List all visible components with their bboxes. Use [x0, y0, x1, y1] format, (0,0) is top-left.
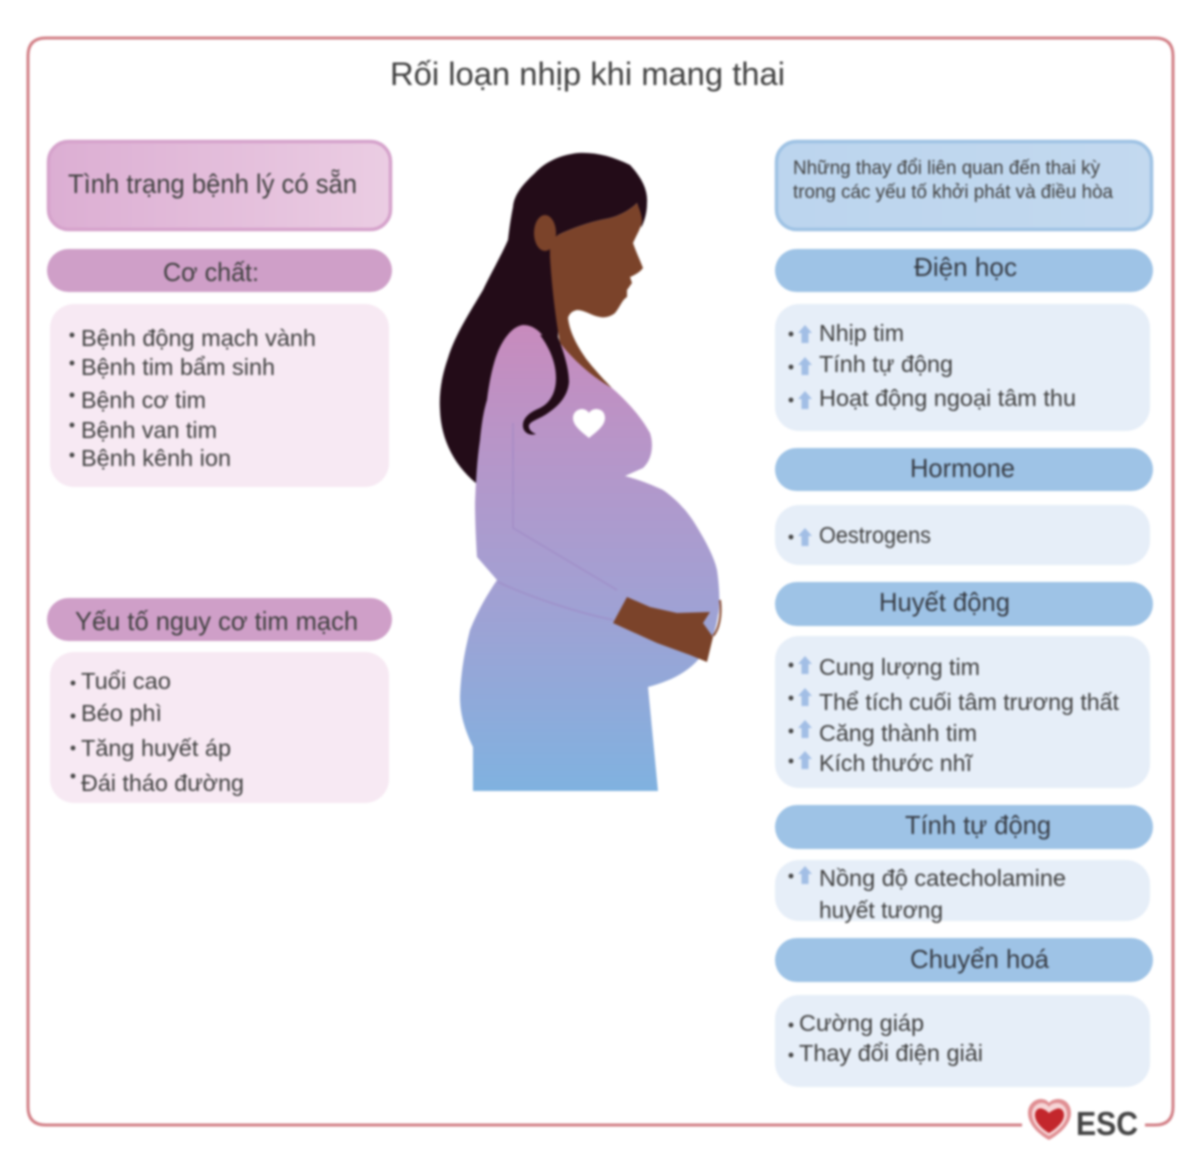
icon: up arrow	[798, 357, 812, 375]
panel: metabolic list: Cường giáp	[799, 1010, 924, 1036]
panel: risk factor list	[50, 652, 389, 803]
panel: haemodynamics list: Kích thước nhĩ	[819, 750, 974, 776]
icon: up arrow	[798, 688, 812, 706]
panel: risk factor list: Tuổi cao	[81, 668, 171, 694]
illustration: pregnant woman	[440, 153, 721, 791]
heading: cardiovascular risk factors	[47, 598, 392, 641]
panel: risk factor list: Tăng huyết áp	[81, 735, 231, 761]
hand	[613, 597, 713, 662]
heading: hormones	[775, 448, 1153, 491]
heading: metabolic	[775, 938, 1153, 982]
panel: pregnancy-related changes heading	[776, 142, 1152, 230]
logo: ESC: ESC	[1076, 1105, 1138, 1142]
panel: substrate list: Bệnh cơ tim	[81, 387, 206, 413]
fingers behind belly	[713, 600, 721, 636]
heading: metabolic: Chuyển hoá	[910, 944, 1050, 974]
panel: substrate list: Bệnh van tim	[81, 417, 217, 443]
icon: up arrow	[798, 866, 812, 884]
heart on chest	[573, 409, 605, 438]
ear	[534, 215, 556, 251]
panel: hormones list	[775, 505, 1150, 565]
panel: electrophysiology list: Tính tự động	[819, 351, 953, 377]
panel: substrate list: Bệnh kênh ion	[81, 445, 231, 471]
panel: haemodynamics list: Căng thành tim	[819, 720, 977, 746]
panel: pregnancy-related changes heading: trong các yếu tố khởi phát và điều hòa	[793, 182, 1113, 203]
heading: substrates	[47, 249, 392, 292]
panel: electrophysiology list	[775, 304, 1150, 431]
icon: up arrow	[798, 656, 812, 674]
panel: pregnancy-related changes heading: Những thay đổi liên quan đến thai kỳ	[793, 158, 1100, 179]
icon: up arrow	[798, 325, 812, 343]
arm fold lines	[498, 423, 617, 620]
hair	[440, 153, 647, 487]
icon: up arrow	[798, 751, 812, 769]
heading: cardiovascular risk factors: Yếu tố nguy cơ tim mạch	[75, 606, 358, 636]
panel: autonomic list: Nồng độ catecholamine	[819, 865, 1066, 891]
dress	[460, 325, 719, 791]
panel: autonomic list: huyết tương	[819, 897, 943, 923]
logo: ESC	[1028, 1099, 1138, 1142]
heading: haemodynamics: Huyết động	[879, 587, 1010, 617]
heading: hormones: Hormone	[910, 453, 1015, 483]
panel: substrate list: Bệnh tim bẩm sinh	[81, 354, 275, 380]
heading: electrophysiology	[775, 249, 1153, 292]
panel: hormones list: Oestrogens	[819, 522, 931, 548]
heading: electrophysiology: Điện học	[914, 252, 1017, 282]
icon: up arrow	[798, 391, 812, 409]
icon: up arrow	[798, 720, 812, 738]
panel: pre-existing conditions heading	[48, 142, 390, 230]
heading: substrates: Cơ chất:	[163, 257, 259, 287]
hair lock over shoulder	[523, 335, 569, 435]
heading: haemodynamics	[775, 582, 1153, 626]
panel: autonomic list	[775, 860, 1150, 923]
heading: autonomic tone	[775, 805, 1153, 849]
panel: metabolic list	[775, 995, 1150, 1087]
icon: up arrow	[798, 528, 812, 546]
panel: electrophysiology list: Hoạt động ngoại tâm thu	[819, 385, 1076, 411]
panel: haemodynamics list: Cung lượng tim	[819, 654, 980, 680]
face and neck	[550, 203, 643, 388]
panel: substrate list: Bệnh động mạch vành	[81, 325, 316, 351]
panel: substrate list	[50, 304, 389, 487]
title: Rối loạn nhịp khi mang thai	[390, 56, 785, 92]
panel: pre-existing conditions heading: Tình trạng bệnh lý có sẵn	[68, 168, 357, 199]
panel: risk factor list: Đái tháo đường	[81, 770, 244, 796]
panel: haemodynamics list: Thể tích cuối tâm trương thất	[819, 689, 1120, 715]
panel: haemodynamics list	[775, 636, 1150, 788]
panel: electrophysiology list: Nhịp tim	[819, 320, 904, 346]
heading: autonomic tone: Tính tự động	[905, 810, 1051, 840]
panel: metabolic list: Thay đổi điện giải	[799, 1040, 983, 1066]
panel: risk factor list: Béo phì	[81, 700, 162, 726]
